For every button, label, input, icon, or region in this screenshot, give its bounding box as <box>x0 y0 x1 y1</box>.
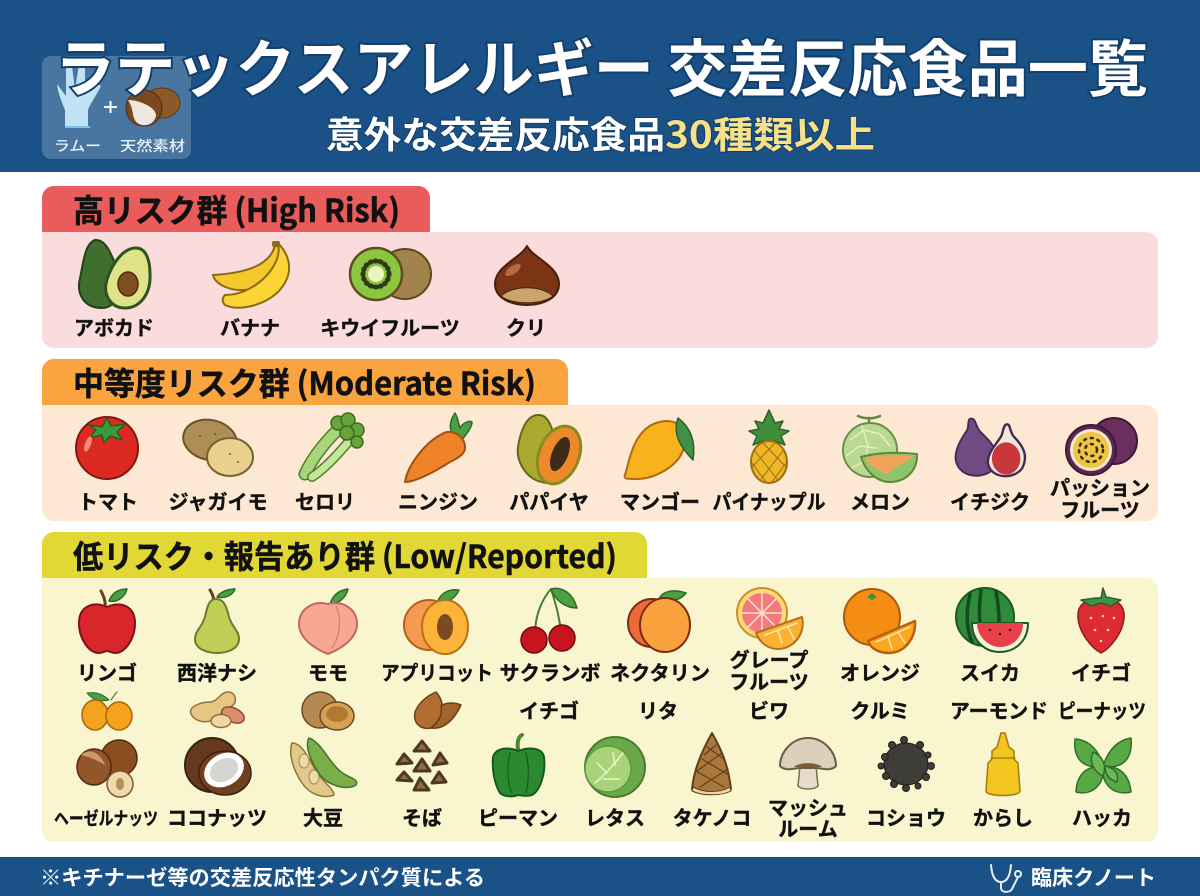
labels: low risk row 1: モモ <box>308 657 348 686</box>
icon badge: latex glove plus natural material <box>42 56 191 159</box>
labels: low risk row 2: ピーナッツ <box>1058 695 1146 724</box>
labels: low risk row 3 <box>54 792 1132 842</box>
labels: moderate risk: パイナップル <box>712 486 826 515</box>
labels: moderate risk: イチジク <box>950 486 1030 515</box>
header band <box>0 0 1200 172</box>
labels: high risk: バナナ <box>220 312 280 341</box>
labels: moderate risk: セロリ <box>295 486 355 515</box>
icon: bamboo shoot <box>692 733 731 795</box>
high risk body <box>42 232 1158 348</box>
labels: moderate risk: ジャガイモ <box>168 486 268 515</box>
labels: low risk row 2: アーモンド <box>950 695 1048 724</box>
labels: moderate risk: マンゴー <box>620 486 700 515</box>
icon: strawberry <box>1078 588 1124 653</box>
labels: low risk row 3: そば <box>402 802 442 831</box>
labels: low risk row 3: ココナッツ <box>167 802 267 831</box>
icon: mango <box>625 418 694 479</box>
labels: low risk row 3: タケノコ <box>673 802 751 831</box>
labels: low risk row 3: からし <box>973 802 1033 831</box>
labels: moderate risk: ニンジン <box>398 486 478 515</box>
labels: low risk row 1: 西洋ナシ <box>177 657 257 686</box>
labels: low risk row 1: ネクタリン <box>610 657 710 686</box>
labels: low risk row 3: レタス <box>585 802 645 831</box>
labels: low risk row 3: マッシュ <box>768 792 848 821</box>
labels: low risk row 1: スイカ <box>960 657 1020 686</box>
labels: moderate risk: フルーツ <box>1060 494 1140 523</box>
icon: soybean <box>291 738 357 796</box>
labels: moderate risk: パパイヤ <box>509 486 589 515</box>
icon: nectarine <box>628 591 690 652</box>
labels: moderate risk: メロン <box>850 486 910 515</box>
labels: high risk <box>74 312 546 341</box>
labels: low risk row 2: ビワ <box>749 695 789 724</box>
icon: passion fruit <box>1066 418 1137 475</box>
icon: black pepper <box>878 736 934 792</box>
labels: low risk row 1: サクランボ <box>500 657 600 686</box>
icon: stethoscope <box>991 865 1021 892</box>
footer band <box>0 857 1200 896</box>
icon: pineapple <box>749 410 789 483</box>
subtitle: 30種類以上 <box>665 105 875 159</box>
labels: low risk row 3: ピーマン <box>478 802 558 831</box>
panel: high risk <box>42 186 1158 348</box>
subtitle <box>326 105 875 159</box>
labels: low risk row 1 <box>77 644 1131 695</box>
panel: moderate risk <box>42 359 1158 523</box>
labels: low risk row 3: ルーム <box>778 813 838 842</box>
labels: low risk row 1: グレープ <box>730 644 808 673</box>
labels: low risk row 1: オレンジ <box>840 657 920 686</box>
labels: high risk: キウイフルーツ <box>320 312 460 341</box>
icon: peach <box>299 589 357 654</box>
icon: orange <box>844 589 915 653</box>
icon badge: latex glove plus natural material: ラムー <box>54 136 101 156</box>
icon: hazelnut <box>77 740 137 797</box>
icon: walnut <box>302 692 354 730</box>
icon: mint <box>1075 738 1131 793</box>
labels: low risk row 3: ハッカ <box>1072 802 1132 831</box>
panel: low / reported risk <box>42 532 1158 842</box>
labels: moderate risk: トマト <box>78 486 138 515</box>
labels: low risk row 3: ヘーゼルナッツ <box>54 805 158 831</box>
labels: moderate risk: パッション <box>1050 472 1150 501</box>
icon: peanut <box>191 692 247 728</box>
icon: chestnut <box>495 246 559 305</box>
icon: watermelon <box>956 588 1028 652</box>
footer brand: 臨床クノート <box>1031 862 1156 892</box>
labels: low risk row 2: クルミ <box>850 695 910 724</box>
icon: banana <box>213 241 289 308</box>
labels: low risk row 2 <box>519 695 1146 724</box>
labels: low risk row 3: 大豆 <box>303 802 343 831</box>
icon: fig <box>956 419 1025 476</box>
icon: mushroom <box>780 738 836 789</box>
icon: avocado <box>79 240 150 308</box>
labels: low risk row 1: イチゴ <box>1071 657 1131 686</box>
icon: potato <box>179 415 253 476</box>
high risk heading: 高リスク群 (High Risk) <box>73 186 400 232</box>
labels: low risk row 1: フルーツ <box>729 666 809 695</box>
icon badge: latex glove plus natural material: 天然素材 <box>120 136 185 156</box>
icon: carrot <box>405 413 472 482</box>
labels: low risk row 1: アプリコット <box>381 657 493 686</box>
icon: apricot <box>404 590 468 654</box>
icon: celery <box>305 413 364 477</box>
labels: high risk: アボカド <box>74 312 154 341</box>
low risk heading: 低リスク・報告あり群 (Low/Reported) <box>73 532 617 578</box>
labels: low risk row 2: リタ <box>638 695 678 724</box>
low risk body <box>42 578 1158 842</box>
icon: green pepper <box>493 735 544 796</box>
title: ラテックスアレルギー 交差反応食品一覧 <box>55 19 1148 109</box>
icon: mustard bottle <box>986 733 1020 796</box>
icon: almond <box>415 692 461 728</box>
icon: coconut <box>185 738 251 795</box>
icon: apple <box>79 589 135 653</box>
icon: papaya <box>518 415 589 490</box>
labels: low risk row 1: リンゴ <box>77 657 137 686</box>
moderate risk body <box>42 405 1158 521</box>
subtitle: 意外な交差反応食品 <box>326 105 665 159</box>
icon: pear <box>195 589 239 653</box>
icon: lettuce <box>585 737 645 797</box>
labels: low risk row 3: コショウ <box>866 802 946 831</box>
icon: tomato <box>76 417 138 479</box>
icon: buckwheat <box>397 741 447 790</box>
footnote: ※キチナーゼ等の交差反応性タンパク質による <box>40 862 485 892</box>
icon: cherry <box>521 588 577 653</box>
icon: melon <box>843 416 917 482</box>
icon: kiwi <box>350 248 431 300</box>
icon: loquat <box>82 692 132 730</box>
icon: grapefruit <box>737 588 803 649</box>
labels: high risk: クリ <box>506 312 546 341</box>
moderate risk heading: 中等度リスク群 (Moderate Risk) <box>73 359 536 405</box>
labels: low risk row 2: イチゴ <box>519 695 579 724</box>
labels: moderate risk <box>78 472 1150 523</box>
